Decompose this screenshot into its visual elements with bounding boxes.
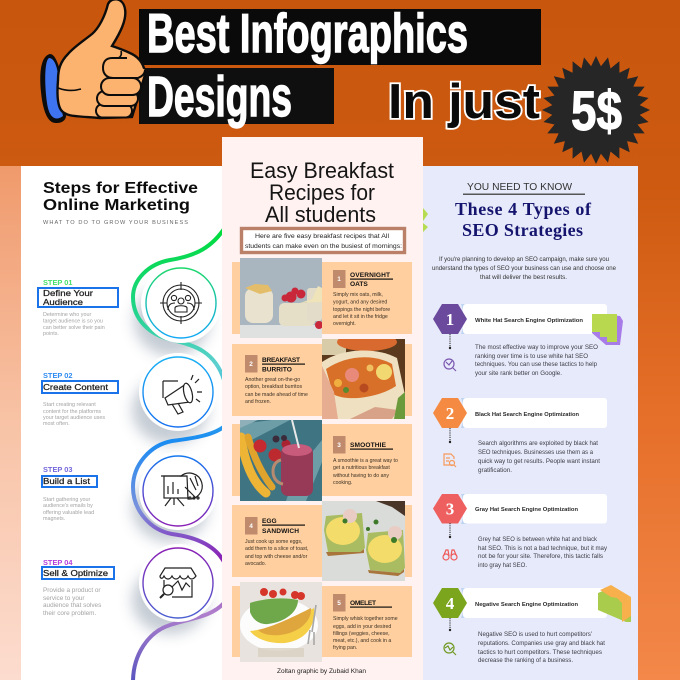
strategy 4 description: Negative SEO is used to hurt competitors' — [478, 631, 592, 638]
strategy 3: gray hat: 3 — [446, 500, 454, 518]
strategy 1: white hat: 1 — [446, 310, 454, 329]
recipe 5 text: frying pan. — [333, 645, 357, 651]
strategy 1 description: your site rank better on Google. — [475, 370, 562, 377]
intro paragraph: If you're planning to develop an SEO campaign, make sure you — [439, 256, 610, 263]
staircase decoration green and orange — [598, 585, 631, 622]
recipe 2 text: option, breakfast burritos — [245, 384, 302, 390]
strategy 2 description: Search algorithms are exploited by black hat — [478, 440, 598, 447]
strategy 4 description — [478, 631, 605, 664]
recipe 2 text: Another great on-the-go — [245, 377, 300, 383]
step 02 text: Create Content — [43, 383, 109, 392]
intro callout box — [242, 228, 404, 252]
step 01 text: points. — [43, 331, 59, 337]
recipe 3 text: SMOOTHIE — [350, 442, 387, 449]
recipe 2 text: and frozen. — [245, 399, 271, 405]
step 4 circle icon: shop analytics — [139, 544, 217, 622]
step 04 text: Provide a product or — [43, 587, 101, 594]
strategy 4: negative: 4 — [446, 594, 455, 613]
strategy 3: gray hat — [433, 494, 607, 538]
thumbs up icon — [40, 0, 145, 123]
recipe 2 text — [245, 355, 308, 405]
strategy 2 description: gratification. — [478, 467, 512, 474]
recipe 4 text: EGG — [262, 518, 277, 525]
step 01 text: Audience — [43, 298, 83, 307]
icon: red binoculars — [443, 550, 457, 560]
recipe 2 text: 2 — [249, 361, 253, 368]
price starburst — [542, 56, 650, 164]
strategy 1 description: ranking over time is to use white hat SEO — [475, 353, 588, 360]
strategy 3 description: not be for your site. Therefore, this tactic falls — [478, 553, 603, 560]
recipe 4 text: 4 — [249, 523, 253, 530]
recipe 3 text: get a nutritious breakfast — [333, 465, 390, 471]
wavy gradient line — [133, 226, 226, 680]
step 03 text — [42, 465, 97, 522]
recipe 2 text: BURRITO — [262, 366, 292, 374]
recipe 4 text: SANDWICH — [262, 528, 299, 535]
recipe cards backgrounds — [232, 262, 412, 657]
photo: breakfast burrito — [322, 333, 405, 419]
intro paragraph: understand the types of SEO your business can use and choose one — [432, 265, 617, 272]
strategy 4 description: tactics to hurt competitors. These techniques — [478, 649, 602, 656]
recipe 1 text — [333, 270, 393, 327]
step 01 text: STEP 01 — [43, 278, 72, 287]
strategy 1 description — [475, 344, 598, 377]
recipe 3 text: 3 — [337, 442, 341, 449]
panel: four types of SEO strategies — [423, 166, 638, 680]
strategy 3 description: Grey hat SEO is between white hat and black — [478, 536, 598, 543]
recipe 3 text: A smoothie is a great way to — [333, 458, 398, 464]
panel heading: Steps for Effective — [43, 180, 198, 197]
photo: omelet — [240, 582, 322, 662]
recipe 1 text: yogurt, and any desired — [333, 300, 387, 306]
strategy 4 description: decrease the ranking of a business. — [478, 657, 573, 664]
heading: these 4 types of SEO strategies: SEO Strategies — [462, 220, 583, 240]
recipe 5 text: fillings (veggies, cheese, — [333, 631, 390, 637]
in just text: In just — [388, 75, 540, 129]
step 02 text: STEP 02 — [43, 371, 72, 380]
panel heading: Online Marketing — [43, 197, 190, 214]
step 03 text: offering valuable lead — [43, 510, 94, 516]
strategy 4: negative: Negative Search Engine Optimization — [475, 602, 578, 608]
heading: you need to know: YOU NEED TO KNOW — [467, 182, 573, 193]
panel heading — [43, 180, 198, 214]
intro callout box: students can make even on the busiest of mornings: — [245, 243, 402, 250]
recipe 1 text: 1 — [337, 276, 341, 283]
recipe 1 text: OATS — [350, 281, 368, 288]
strategy 2: black hat: 2 — [446, 404, 454, 423]
strategy 2 description: SEO techniques. Businesses use them as a — [478, 449, 593, 456]
recipe 5 text: Simply whisk together some — [333, 616, 398, 622]
recipe 1 text: OVERNIGHT — [350, 272, 390, 279]
recipe 2 text: BREAKFAST — [262, 357, 300, 364]
step 04 text: Sell & Optimize — [43, 569, 108, 578]
photo: smoothie — [240, 420, 322, 501]
step 04 text: audience that solves — [43, 602, 101, 609]
panel: steps for effective online marketing — [21, 166, 226, 680]
recipe 4 text: Just cook up some eggs, — [245, 539, 302, 545]
left background strip — [0, 166, 21, 680]
recipe 4 text: and top with cheese and/or — [245, 554, 308, 560]
recipe 2 text: can be made ahead of time — [245, 392, 308, 398]
recipes heading: All students — [265, 202, 376, 227]
strategy 3 description: hat SEO. This is not a bad technique, but it may — [478, 545, 608, 552]
icon: purple magnifier — [444, 359, 456, 371]
strategy 2 description — [478, 440, 600, 474]
recipe 1 text: Simply mix oats, milk, — [333, 292, 383, 298]
recipe 4 text: add them to a slice of toast, — [245, 546, 308, 552]
step 02 text: Start creating relevant — [43, 402, 96, 408]
recipe 5 text: 5 — [337, 600, 341, 607]
strategy 2: black hat — [433, 398, 607, 443]
recipe 4 text — [245, 517, 308, 567]
step 04 text: STEP 04 — [43, 558, 73, 567]
recipe 1 text: and let it sit in the fridge — [333, 314, 388, 320]
step 03 text: audience's emails by — [43, 503, 93, 509]
step 02 text: most often. — [43, 421, 70, 427]
strategy 1 description: The most effective way to improve your SEO — [475, 344, 598, 351]
strategy 3: gray hat: Gray Hat Search Engine Optimization — [475, 507, 578, 513]
step 03 text: Build a List — [43, 477, 91, 486]
intro callout box: Here are five easy breakfast recipes that All — [255, 233, 390, 240]
step 01 text: can better solve their pain — [43, 325, 105, 331]
strategy 2: black hat: Black Hat Search Engine Optimization — [475, 412, 579, 418]
step 04 text — [42, 558, 114, 617]
step 2 circle icon: megaphone — [139, 353, 217, 431]
footer credit: Zoltan graphic by Zubaid Khan — [277, 668, 366, 675]
title box: designs: Designs — [147, 65, 292, 129]
photo: egg sandwich — [322, 501, 405, 581]
recipe 3 text: without having to do any — [333, 473, 389, 479]
step 03 text: Start gathering your — [43, 497, 91, 503]
step 02 text: content for the platforms — [43, 409, 101, 415]
recipe 4 text: avocado. — [245, 561, 266, 567]
step 04 text: service to your — [43, 595, 85, 602]
recipe 5 text: eggs, add in your desired — [333, 624, 391, 630]
step 01 text: Define Your — [43, 289, 93, 298]
step 02 text: your target audience uses — [43, 415, 105, 421]
photo: overnight oats — [240, 258, 323, 338]
step 3 circle icon: presentation board — [139, 452, 217, 530]
recipe 1 text: overnight. — [333, 321, 356, 327]
strategy 3 description: into gray hat SEO. — [478, 562, 527, 569]
strategy 4 description: reputations. Companies use gray and black hat — [478, 640, 605, 647]
step 03 text: STEP 03 — [43, 465, 72, 474]
strategy 1 description: techniques. You can use these tactics to help — [475, 361, 597, 368]
intro paragraph — [432, 256, 617, 281]
step 01 text: Determine who your — [43, 312, 91, 318]
step 1 circle icon: audience target — [141, 263, 221, 343]
strategy 1: white hat: White Hat Search Engine Optimization — [475, 318, 583, 324]
icon: orange document search — [444, 454, 456, 467]
step 01 text — [38, 278, 118, 337]
circle shadows — [132, 284, 210, 634]
recipes heading: Easy Breakfast — [250, 158, 394, 183]
strategy 3 description — [478, 536, 608, 569]
recipe 5 text: meat, etc.), and cook in a — [333, 638, 391, 644]
strategy 1: white hat — [433, 304, 607, 349]
recipe 1 text: toppings the night before — [333, 307, 390, 313]
intro paragraph: that will deliver the best results. — [480, 274, 567, 281]
recipes heading: Recipes for — [269, 180, 375, 205]
step 02 text — [42, 371, 118, 427]
step 04 text: their core problem. — [43, 610, 97, 617]
recipe 3 text: cooking. — [333, 480, 352, 486]
panel: easy breakfast recipes — [222, 137, 423, 680]
panel subtitle: WHAT TO DO TO GROW YOUR BUSINESS — [43, 220, 188, 226]
recipe 5 text: OMELET — [350, 600, 376, 607]
heading: these 4 types of SEO strategies — [455, 199, 592, 240]
heading: these 4 types of SEO strategies: These 4 Types of — [455, 199, 592, 219]
recipes heading — [250, 158, 394, 227]
strategy 2 description: quick way to get results. People want instant — [478, 458, 600, 465]
price starburst: 5$ — [571, 79, 622, 142]
step 03 text: magnets. — [43, 516, 65, 522]
title box: best infographics: Best Infographics — [147, 2, 468, 64]
small green decoration — [423, 208, 428, 232]
step 01 text: target audience is so you — [43, 318, 103, 324]
recipe 5 text — [333, 594, 398, 651]
strategy 4: negative — [433, 588, 607, 631]
staircase decoration purple and green — [592, 314, 623, 345]
icon: green chart magnifier — [444, 643, 456, 655]
recipe 3 text — [333, 436, 398, 486]
